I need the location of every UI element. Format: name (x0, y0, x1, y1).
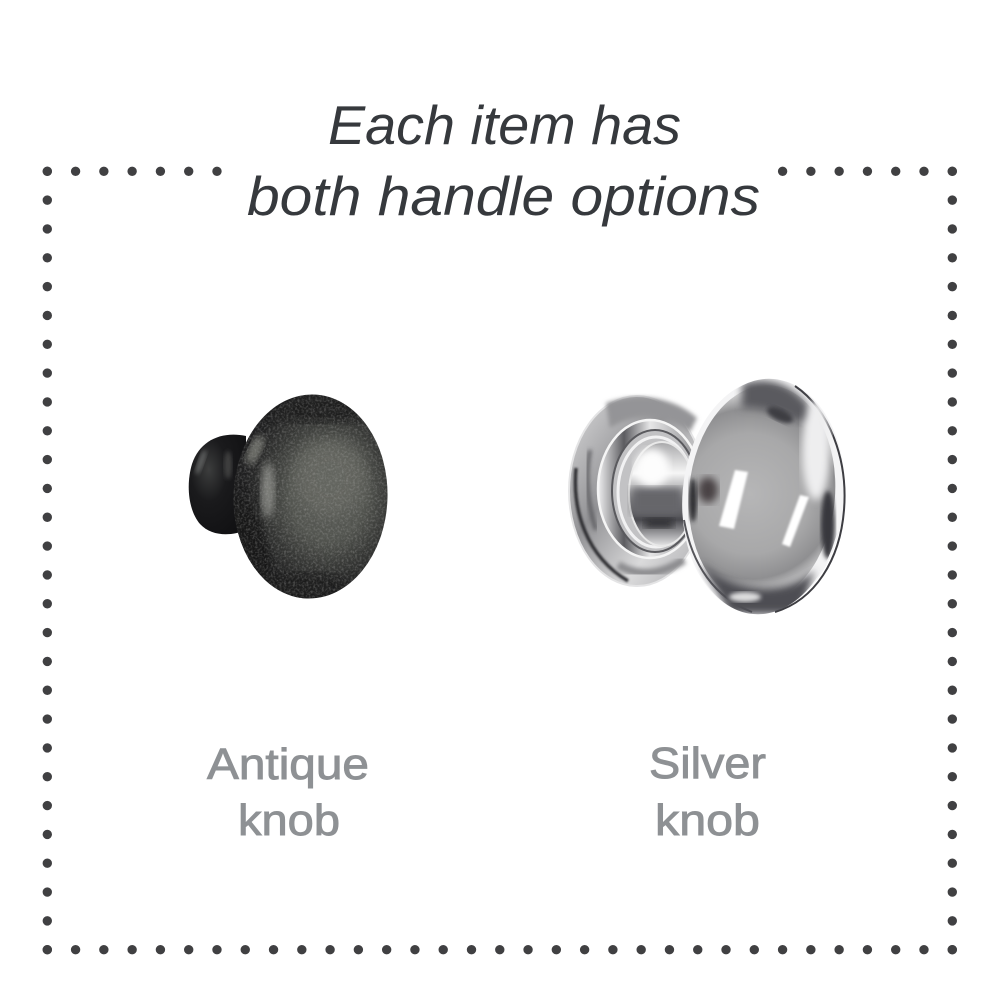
antique knob stem (189, 435, 246, 534)
dotted border frame (47, 171, 958, 955)
silver knob back plate (569, 396, 705, 586)
label: antique knob: Antique (207, 740, 369, 789)
title (247, 94, 760, 227)
title: Each item has (328, 94, 681, 156)
silver knob head (682, 378, 846, 614)
infographic canvas (42, 104, 957, 954)
silver knob photo (569, 372, 854, 621)
antique knob head (234, 394, 388, 598)
title: both handle options (247, 165, 760, 227)
antique knob photo (189, 392, 391, 602)
label: silver knob: Silver (649, 739, 766, 788)
silver knob reflections (689, 380, 835, 614)
label: silver knob (649, 739, 766, 845)
silver knob stem (629, 442, 695, 546)
label: silver knob: knob (655, 796, 760, 845)
label: antique knob (207, 740, 369, 845)
label: antique knob: knob (238, 796, 340, 845)
